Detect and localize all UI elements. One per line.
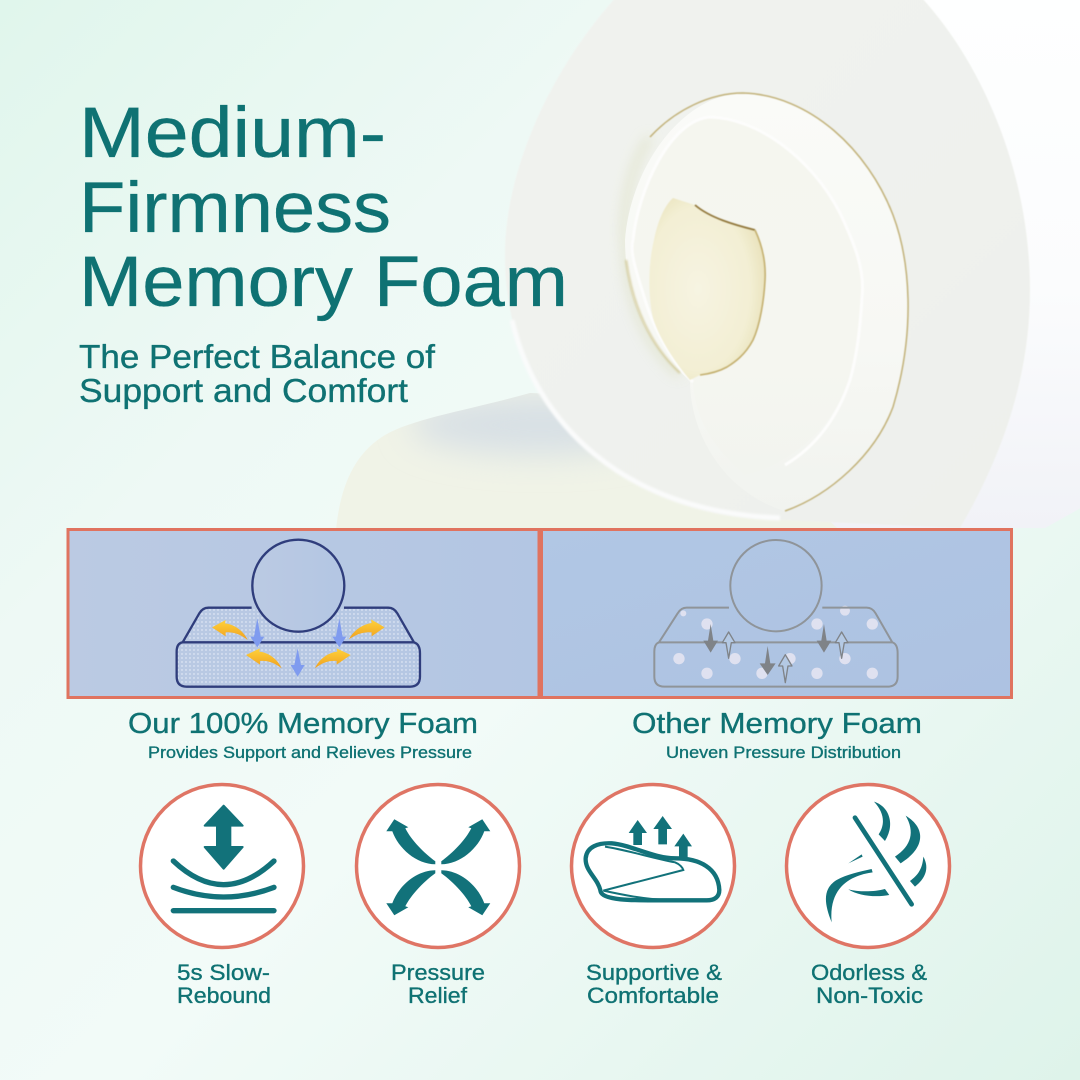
title	[79, 94, 568, 322]
unrolled flap	[336, 393, 837, 528]
yellow rebound arrows	[212, 619, 385, 668]
uneven arrows	[703, 624, 831, 675]
feature label: pressure relief	[391, 960, 485, 1008]
feature label: odorless	[811, 960, 927, 1008]
body circle	[252, 540, 344, 632]
olive haze around spiral	[624, 137, 680, 375]
subtitle: Support and Comfort	[79, 372, 408, 409]
caption: our memory foam: Provides Support and Relieves Pressure	[148, 744, 472, 762]
panel: other memory foam diagram	[542, 530, 1012, 698]
body circle	[730, 540, 822, 631]
feature label: odorless: Non-Toxic	[816, 983, 923, 1008]
inner layer	[672, 120, 780, 146]
title: Firmness	[79, 169, 391, 248]
caption: our memory foam: Our 100% Memory Foam	[128, 708, 478, 740]
blue pressure arrows	[250, 618, 346, 677]
caption: other memory foam: Uneven Pressure Distribution	[666, 744, 901, 762]
feature label: supportive: Comfortable	[587, 983, 719, 1008]
feature label: pressure relief: Pressure	[391, 960, 485, 985]
feature label: odorless: Odorless &	[811, 960, 927, 985]
subtitle: The Perfect Balance of	[79, 338, 436, 375]
icon: odorless	[786, 784, 950, 948]
roll side	[924, 0, 1080, 506]
mattress outline	[654, 608, 898, 687]
caption: our memory foam	[128, 708, 478, 762]
feature label: pressure relief: Relief	[408, 983, 468, 1008]
icon: supportive pillow	[572, 784, 734, 948]
foam roll photo	[330, 0, 1080, 535]
caption: other memory foam: Other Memory Foam	[632, 708, 922, 740]
caption: other memory foam	[632, 708, 922, 762]
feature label: supportive: Supportive &	[586, 960, 722, 985]
title: Memory Foam	[79, 243, 568, 322]
title: Medium-	[79, 94, 386, 173]
icon: slow rebound	[140, 784, 304, 948]
feature label: slow rebound: 5s Slow-	[177, 960, 270, 985]
feature label: supportive	[586, 960, 722, 1008]
panel: our memory foam diagram	[68, 530, 539, 698]
disc edge bevel	[512, 320, 780, 518]
icon: pressure relief	[356, 784, 520, 948]
outer disc	[505, 0, 1030, 528]
feature label: slow rebound	[177, 960, 271, 1008]
mattress with dot texture	[177, 608, 420, 687]
foam dots	[673, 606, 878, 679]
subtitle	[79, 338, 436, 409]
cream centre	[649, 198, 765, 380]
second layer	[625, 94, 906, 373]
feature label: slow rebound: Rebound	[177, 983, 271, 1008]
